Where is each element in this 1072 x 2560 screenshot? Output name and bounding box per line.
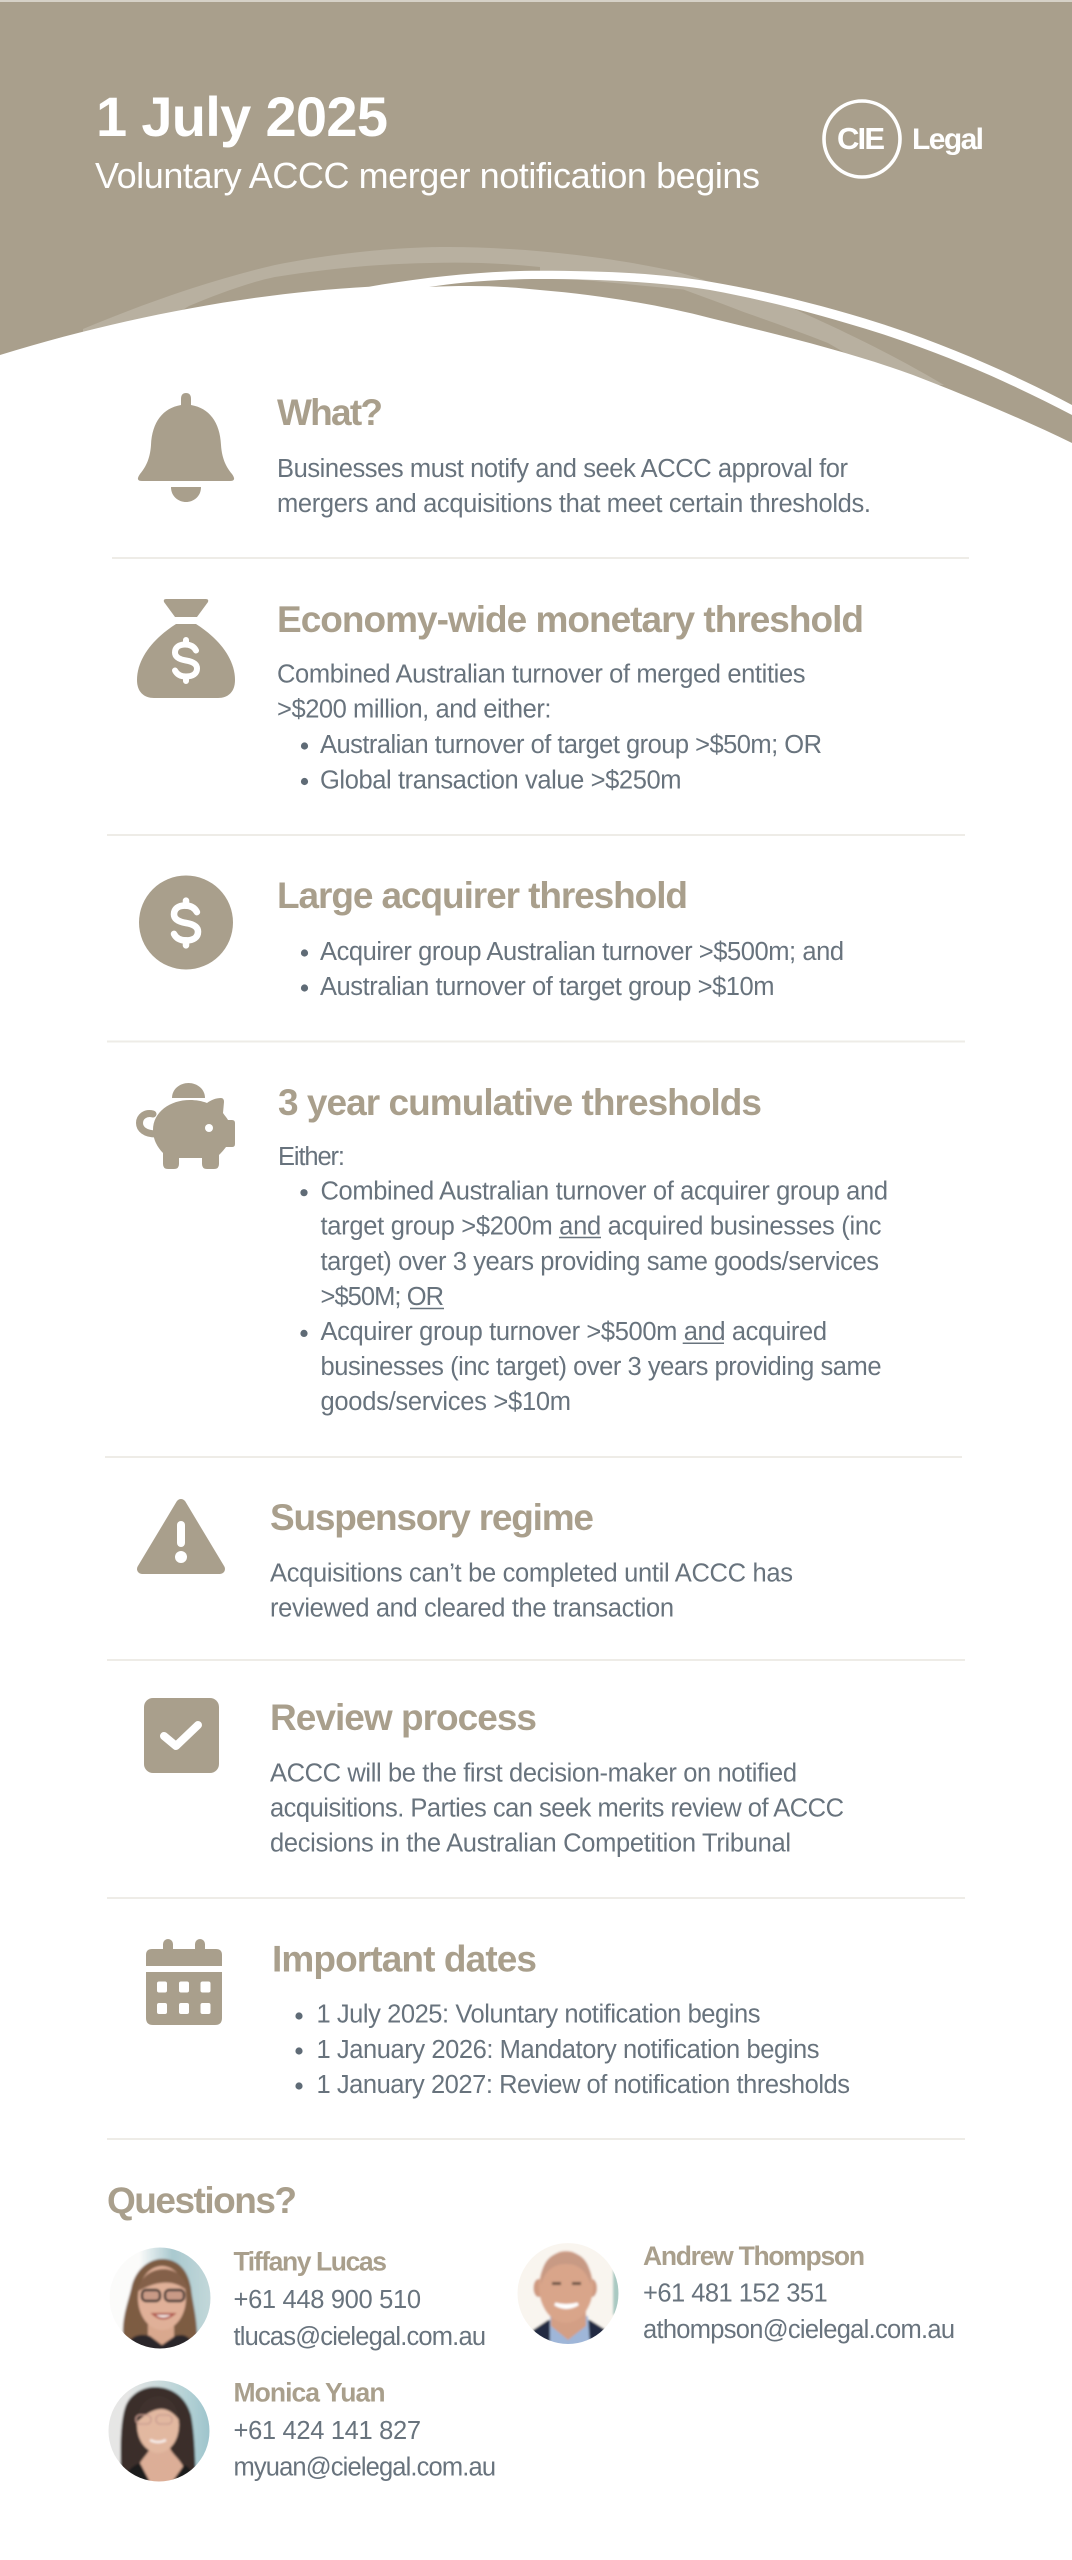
text: economy-wide body: Global transaction value >$250m — [320, 766, 682, 794]
heading: economy-wide: Economy-wide monetary threshold — [277, 599, 864, 640]
heading: what: What? — [277, 392, 383, 433]
text: review body — [270, 1760, 844, 1858]
text: 3 year cumulative body: businesses (inc target) over 3 years providing same — [320, 1353, 882, 1381]
text: review body: decisions in the Australian Competition Tribunal — [270, 1830, 791, 1858]
panel: economy-wide monetary threshold — [137, 599, 864, 794]
icon: dollar coin — [139, 876, 233, 970]
text: 3 year cumulative body: goods/services >$10m — [320, 1388, 571, 1416]
text: what body: mergers and acquisitions that meet certain thresholds. — [277, 490, 871, 518]
text: large acquirer bullets — [301, 938, 844, 1001]
text: 3 year cumulative body: >$50M; OR — [320, 1283, 444, 1311]
logo: CIE Legal — [824, 101, 984, 177]
text: large acquirer bullets: Acquirer group Australian turnover >$500m; and — [320, 938, 844, 966]
text: economy-wide body: Combined Australian turnover of merged entities — [277, 660, 806, 688]
text: suspensory body: Acquisitions can’t be completed until ACCC has — [270, 1560, 793, 1588]
text: review body: ACCC will be the first decision-maker on notified — [270, 1760, 797, 1788]
panel: review process — [144, 1697, 844, 1858]
phone: Monica Yuan: +61 424 141 827 — [234, 2417, 421, 2445]
text: dates list — [295, 2001, 850, 2099]
text: 3 year cumulative body — [278, 1143, 888, 1416]
photo: Monica Yuan — [108, 2380, 210, 2482]
logo: CIE Legal: CIE — [837, 121, 885, 156]
text: dates list: 1 July 2025: Voluntary notification begins — [316, 2001, 760, 2029]
panel: questions and contacts — [106, 2180, 955, 2490]
phone: Andrew Thompson: +61 481 152 351 — [643, 2280, 828, 2308]
text: suspensory body — [270, 1560, 793, 1623]
photo: Andrew Thompson — [516, 2242, 620, 2346]
icon: warning triangle — [142, 1504, 220, 1569]
heading: review process: Review process — [270, 1697, 537, 1738]
text: 3 year cumulative body: target group >$200m and acquired businesses (inc — [320, 1212, 882, 1240]
icon: calendar — [146, 1939, 222, 2025]
heading: questions: Questions? — [107, 2180, 297, 2221]
panel: suspensory regime — [142, 1497, 793, 1623]
name: Tiffany Lucas: Tiffany Lucas — [234, 2247, 387, 2277]
icon: bell — [138, 393, 234, 502]
contact: Tiffany Lucas — [108, 2246, 486, 2352]
text: economy-wide body: >$200 million, and either: — [277, 696, 552, 724]
heading: large acquirer: Large acquirer threshold — [277, 875, 688, 916]
icon: money bag — [137, 599, 235, 698]
phone: Tiffany Lucas: +61 448 900 510 — [234, 2286, 421, 2314]
title: 1 July 2025 — [96, 85, 388, 148]
heading: suspensory regime: Suspensory regime — [270, 1497, 594, 1538]
subtitle: Voluntary ACCC merger notification begins — [95, 155, 760, 196]
logo: CIE Legal: Legal — [912, 123, 984, 156]
email: Andrew Thompson: athompson@cielegal.com.au — [643, 2316, 955, 2344]
text: 3 year cumulative body: Combined Australian turnover of acquirer group and — [320, 1177, 888, 1205]
text: dates list: 1 January 2027: Review of notification thresholds — [316, 2071, 850, 2099]
text: economy-wide body: Australian turnover of target group >$50m; OR — [320, 731, 822, 759]
email: Tiffany Lucas: tlucas@cielegal.com.au — [234, 2323, 486, 2351]
text: 3 year cumulative body: Either: — [278, 1143, 345, 1171]
text: suspensory body: reviewed and cleared the transaction — [270, 1595, 674, 1623]
email: Monica Yuan: myuan@cielegal.com.au — [234, 2454, 496, 2482]
text: economy-wide body — [277, 660, 822, 794]
text: what body — [277, 455, 871, 518]
text: what body: Businesses must notify and seek ACCC approval for — [277, 455, 848, 483]
name: Monica Yuan: Monica Yuan — [234, 2378, 386, 2408]
text: large acquirer bullets: Australian turnover of target group >$10m — [320, 973, 774, 1001]
text: 3 year cumulative body: Acquirer group turnover >$500m and acquired — [320, 1318, 827, 1346]
panel: what — [138, 392, 871, 518]
text: dates list: 1 January 2026: Mandatory notification begins — [316, 2036, 820, 2064]
icon: piggy bank — [140, 1083, 235, 1169]
icon: check box — [144, 1698, 219, 1773]
text: review body: acquisitions. Parties can seek merits review of ACCC — [270, 1795, 844, 1823]
text: 3 year cumulative body: target) over 3 years providing same goods/services — [320, 1248, 879, 1276]
heading: 3 year cumulative: 3 year cumulative thresholds — [278, 1082, 762, 1123]
panel: large acquirer threshold — [139, 875, 844, 1001]
contact: Monica Yuan — [108, 2380, 494, 2482]
name: Andrew Thompson: Andrew Thompson — [643, 2241, 865, 2271]
panel: important dates — [146, 1939, 850, 2099]
heading: important dates: Important dates — [272, 1939, 537, 1980]
photo: Tiffany Lucas — [121, 2248, 210, 2348]
panel: 3 year cumulative thresholds — [140, 1082, 888, 1416]
contact: Andrew Thompson — [516, 2241, 955, 2346]
